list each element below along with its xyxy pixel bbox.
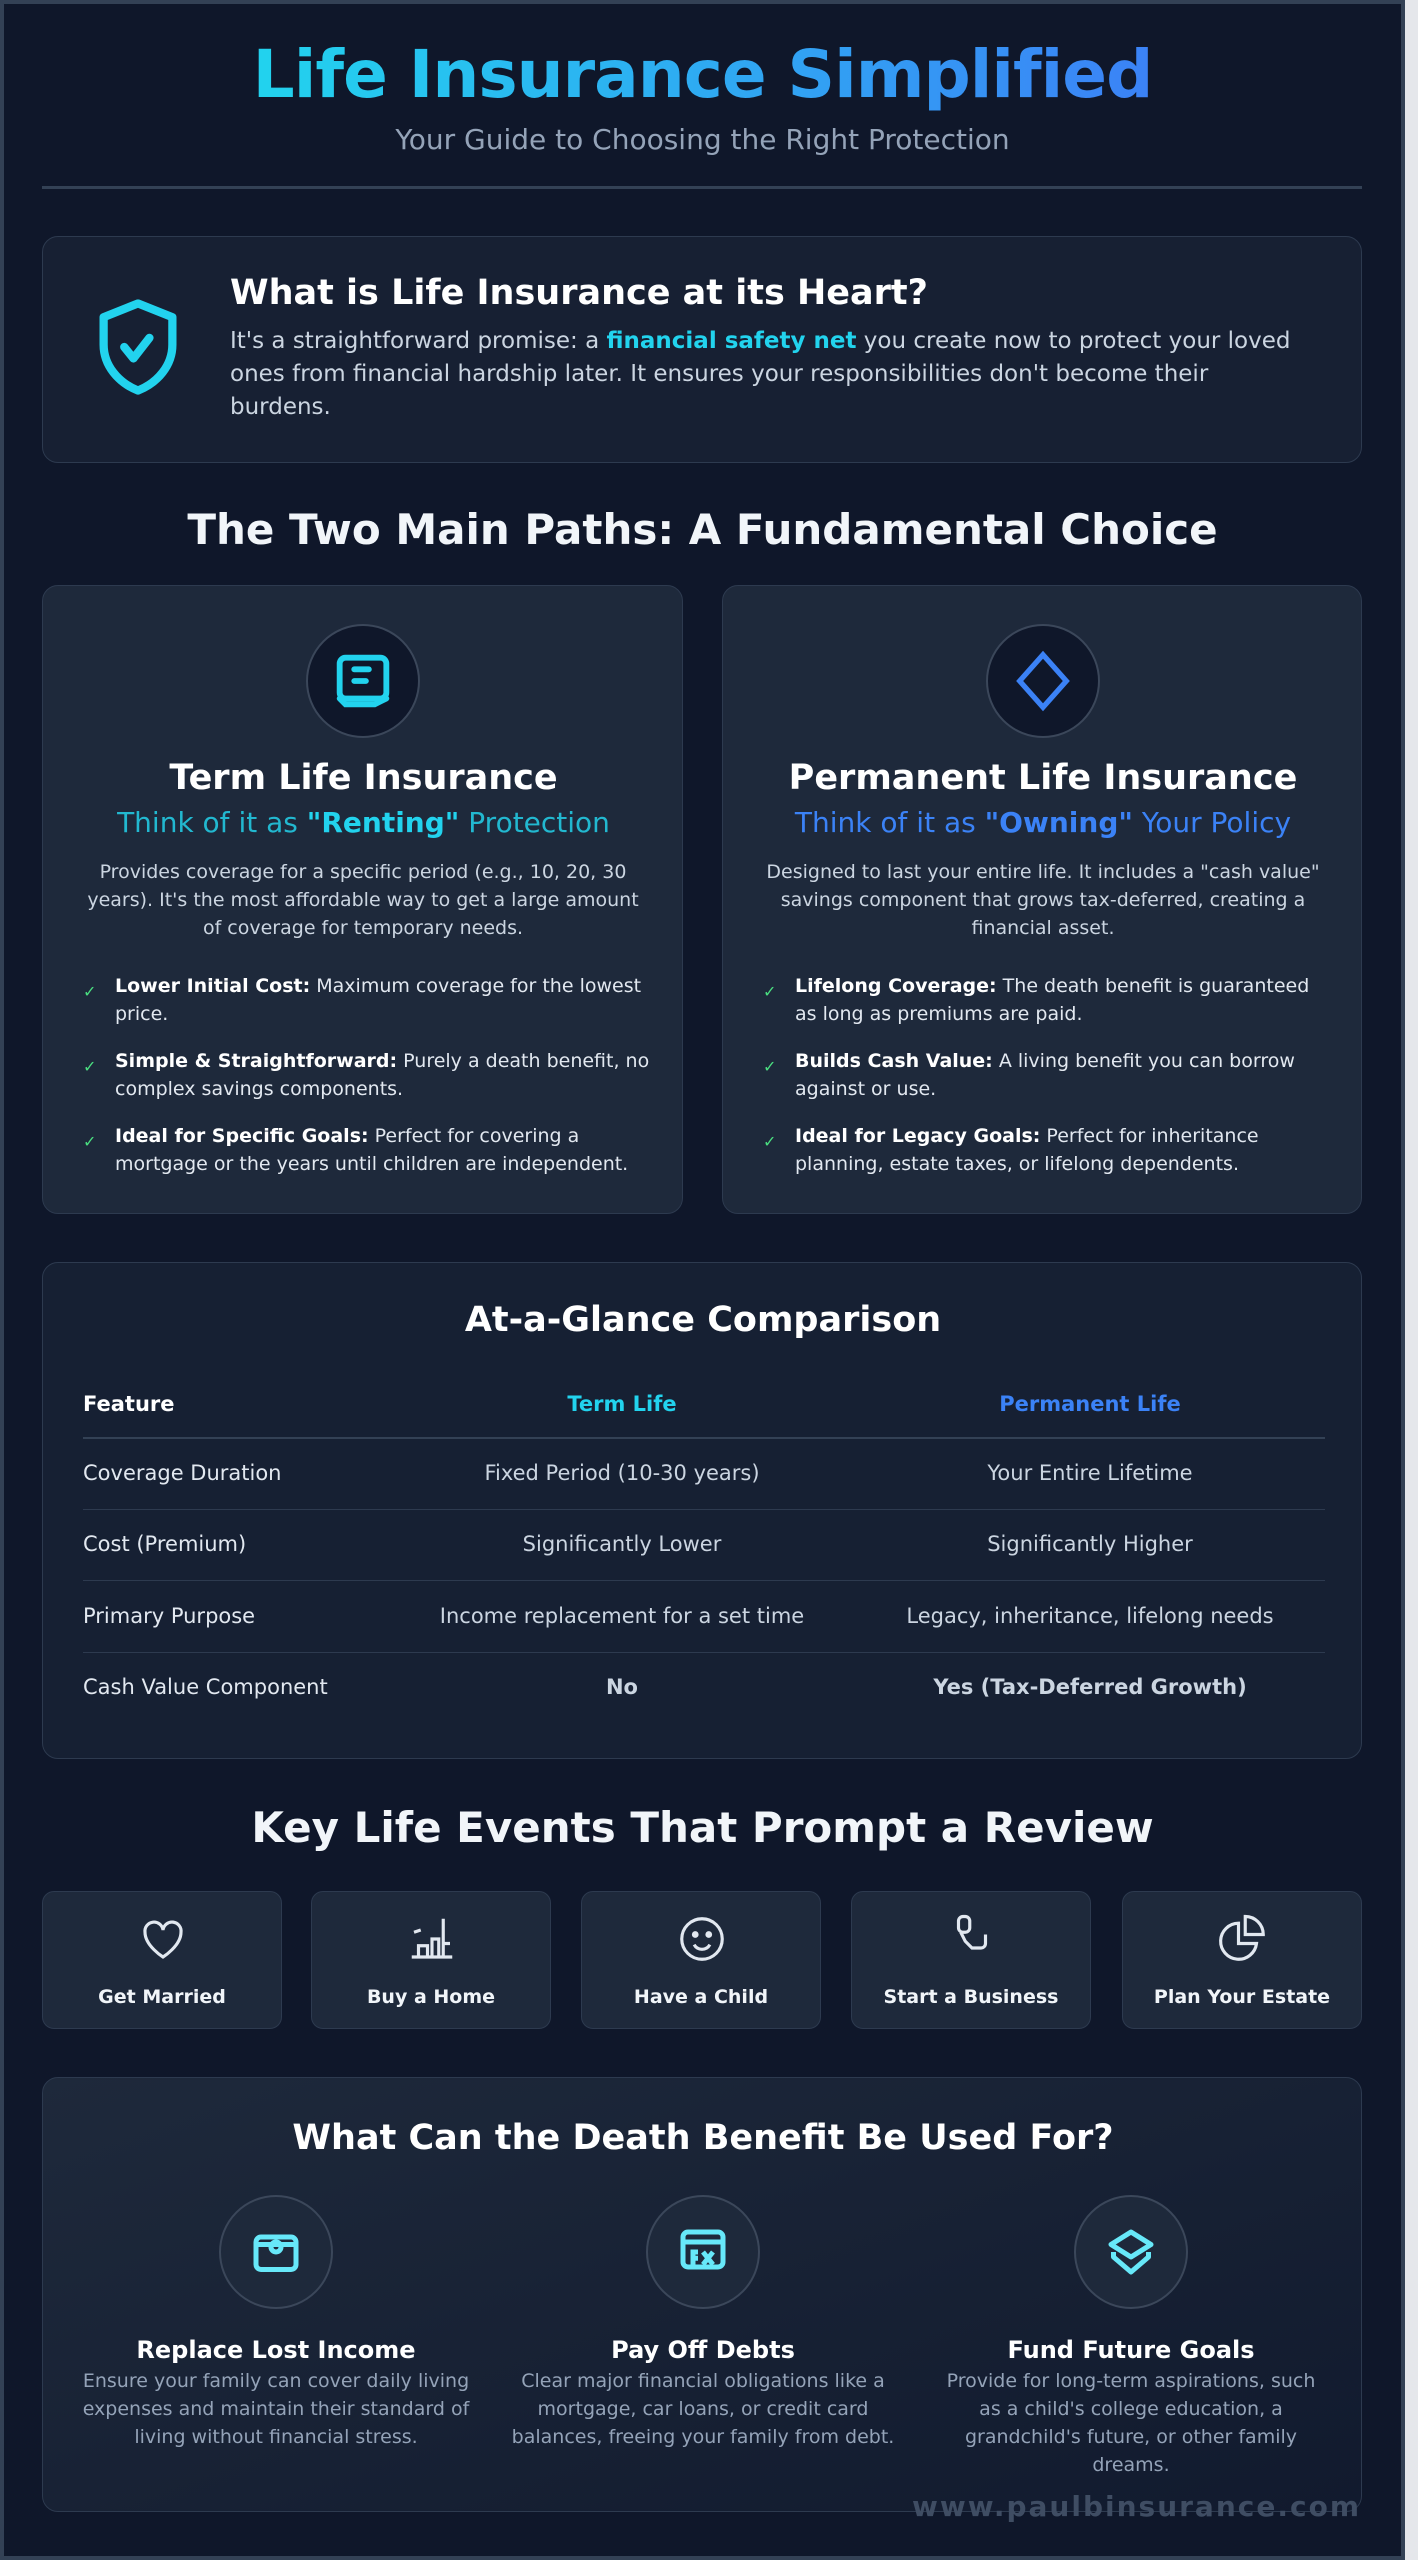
panel: death benefit uses: Replace Lost Income	[136, 2336, 416, 2364]
heading: comparison: At-a-Glance Comparison	[465, 1300, 941, 1340]
panel: permanent life	[722, 585, 1362, 1214]
panel: death benefit uses: Ensure your family can cover daily living expenses and maintain their standard of living without financial stress.	[83, 2370, 469, 2448]
panel: permanent life: ✓	[763, 1057, 776, 1076]
heading: death benefit: What Can the Death Benefit Be Used For?	[292, 2118, 1114, 2158]
panel: comparison table: Coverage Duration	[83, 1461, 282, 1485]
event: home: Buy a Home	[367, 1986, 495, 2008]
panel: permanent life: Lifelong Coverage: The death benefit is guaranteed as long as premiums are paid.	[795, 975, 1309, 1025]
panel: comparison table: Income replacement for a set time	[440, 1604, 804, 1628]
heading: life events: Key Life Events That Prompt a Review	[251, 1803, 1154, 1852]
panel: permanent life: ✓	[763, 1132, 776, 1151]
subtitle: Your Guide to Choosing the Right Protection	[395, 123, 1010, 156]
panel: comparison table: Legacy, inheritance, lifelong needs	[906, 1604, 1274, 1628]
watermark: www.paulbinsurance.com	[912, 2490, 1361, 2523]
panel: permanent life: Ideal for Legacy Goals: Perfect for inheritance planning, estate taxes, or lifelong dependents.	[795, 1125, 1259, 1175]
panel: death benefit uses: Provide for long-term aspirations, such as a child's college education, a grandchild's future, or other family dreams.	[947, 2370, 1315, 2476]
panel: term life: ✓	[83, 982, 96, 1001]
event: estate: Plan Your Estate	[1154, 1986, 1330, 2008]
icon: permanent	[986, 624, 1100, 738]
panel: comparison table: Feature	[83, 1392, 174, 1416]
text: term desc: Provides coverage for a specific period (e.g., 10, 20, 30 years). It's the most affordable way to get a large amount of coverage for temporary needs.	[87, 861, 639, 939]
panel: comparison table: Significantly Lower	[523, 1532, 721, 1556]
event: child: Have a Child	[634, 1986, 768, 2008]
panel: death benefit uses: Pay Off Debts	[611, 2336, 795, 2364]
panel: term life: ✓	[83, 1132, 96, 1151]
event: business: Start a Business	[884, 1986, 1058, 2008]
panel: comparison table: Your Entire Lifetime	[987, 1461, 1193, 1485]
panel: comparison table: No	[606, 1675, 638, 1699]
panel: death benefit uses: Clear major financial obligations like a mortgage, car loans, or credit card balances, freeing your family from debt.	[512, 2370, 894, 2448]
panel: comparison table: Cost (Premium)	[83, 1532, 246, 1556]
benefit: future goals	[947, 2195, 1315, 2476]
panel: comparison table: Fixed Period (10-30 years)	[484, 1461, 760, 1485]
panel: death benefit uses	[42, 2077, 1362, 2512]
panel: term life: Ideal for Specific Goals: Perfect for covering a mortgage or the years until children are independent.	[115, 1125, 628, 1175]
benefit: debts	[512, 2195, 894, 2448]
benefit: income	[83, 2195, 470, 2448]
panel: term life	[42, 585, 683, 1214]
event: married	[42, 1891, 282, 2029]
text: intro: It's a straightforward promise: a financial safety net you create now to protect your loved ones from financial hardship later. It ensures your responsibilities don't become their burdens.	[230, 328, 1290, 420]
panel: comparison table: Primary Purpose	[83, 1604, 255, 1628]
event: child	[581, 1891, 821, 2029]
panel: comparison table: Yes (Tax-Deferred Growth)	[933, 1675, 1247, 1699]
heading: term: Term Life Insurance	[169, 758, 558, 798]
panel: comparison table	[42, 1262, 1362, 1759]
panel: term life: Simple & Straightforward: Purely a death benefit, no complex savings components.	[115, 1050, 649, 1100]
panel: permanent life: Think of it as "Owning" Your Policy	[795, 806, 1291, 839]
panel: permanent life: Builds Cash Value: A living benefit you can borrow against or use.	[795, 1050, 1295, 1100]
heading: two paths: The Two Main Paths: A Fundamental Choice	[187, 505, 1218, 554]
text: permanent desc: Designed to last your entire life. It includes a "cash value" savings component that grows tax-deferred, creating a financial asset.	[766, 861, 1320, 939]
title: Life Insurance Simplified	[253, 36, 1152, 113]
panel: term life: Think of it as "Renting" Protection	[117, 806, 610, 839]
event: home	[311, 1891, 551, 2029]
event: married: Get Married	[98, 1986, 226, 2008]
heading: permanent: Permanent Life Insurance	[789, 758, 1297, 798]
panel: comparison table: Term Life	[567, 1392, 677, 1416]
panel: term life: ✓	[83, 1057, 96, 1076]
icon: shield	[100, 299, 176, 395]
icon: term	[306, 624, 420, 738]
panel: death benefit uses: Fund Future Goals	[1007, 2336, 1255, 2364]
panel: comparison table: Cash Value Component	[83, 1675, 328, 1699]
heading: intro: What is Life Insurance at its Heart?	[230, 273, 928, 313]
event: business	[851, 1891, 1091, 2029]
panel: comparison table: Significantly Higher	[987, 1532, 1193, 1556]
event: estate	[1122, 1891, 1362, 2029]
panel: comparison table: Permanent Life	[999, 1392, 1181, 1416]
panel: intro	[42, 236, 1362, 463]
panel: permanent life: ✓	[763, 982, 776, 1001]
panel: term life: Lower Initial Cost: Maximum coverage for the lowest price.	[115, 975, 641, 1025]
